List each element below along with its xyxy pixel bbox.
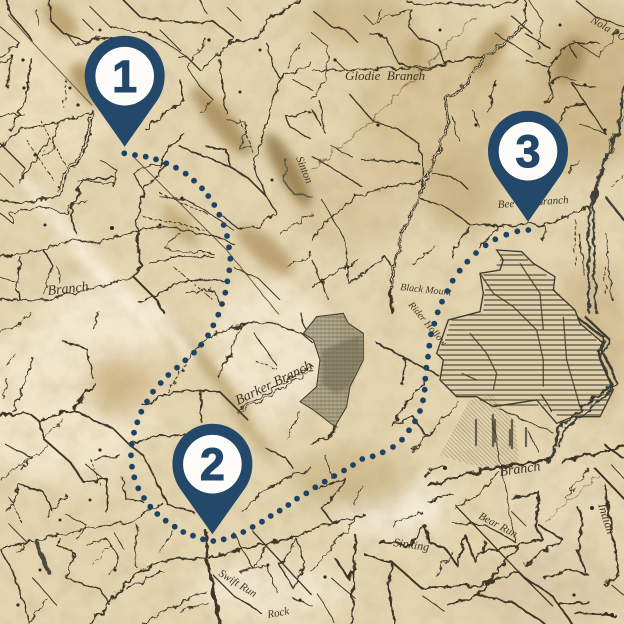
- label: Bee Branch: Bee Branch: [497, 194, 569, 211]
- label: Branch: Branch: [47, 280, 89, 299]
- right hatch interior streams: [462, 263, 580, 407]
- label: Swift Run: Swift Run: [216, 567, 259, 600]
- label: Sinking: Sinking: [393, 535, 430, 554]
- label: Branch, lower right: Branch: [498, 459, 541, 480]
- pin 1: [85, 36, 165, 147]
- lines: top-right quadrant: [312, 0, 624, 312]
- hatched land areas: [300, 250, 613, 427]
- lower hatched slope: [440, 395, 526, 470]
- label: Rock: Rock: [265, 605, 291, 621]
- central dark hatch: [300, 313, 363, 427]
- label: Glodie Branch: Glodie Branch: [345, 68, 425, 83]
- pin 2: 2: [200, 439, 225, 490]
- dotted route: [121, 150, 531, 544]
- pin 1: 1: [112, 51, 137, 102]
- lines: top-left quadrant: [0, 0, 312, 312]
- lines: bottom-left quadrant: [0, 312, 312, 624]
- lines: bottom-right quadrant: [312, 315, 624, 624]
- right hatched area: [437, 250, 613, 423]
- label: Sinton: Sinton: [293, 155, 315, 186]
- pin 3: [488, 111, 568, 222]
- label: Bear Run: Bear Run: [477, 510, 520, 541]
- label: Black Mountain: Black Mount: [400, 282, 452, 298]
- label: Barker Branch: Barker Branch: [233, 358, 315, 409]
- label: Rider Hollow: Rider Hollow: [405, 299, 449, 349]
- central shade: [322, 335, 363, 393]
- pin 2: [172, 424, 252, 534]
- label: Indian: Indian: [595, 501, 618, 536]
- pin 3: 3: [515, 126, 541, 177]
- right hatch lines: [438, 255, 613, 415]
